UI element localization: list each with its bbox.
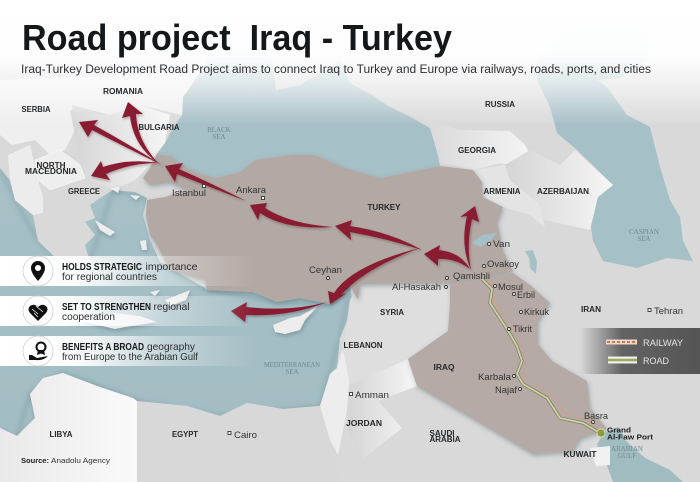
city markers and labels: Tikrit — [513, 324, 532, 335]
text: holds strategic: for regional countries — [62, 271, 157, 283]
title: Road project Iraq - Turkey — [22, 17, 452, 58]
city markers and labels: Tehran — [654, 306, 683, 317]
icon: location pin — [23, 256, 53, 286]
arrow: to Ankara — [250, 203, 333, 227]
Jordan — [348, 359, 417, 459]
arrow: to Serbia — [79, 120, 162, 165]
arrow: Ankara to Thrace — [165, 163, 246, 201]
arrow: to Romania — [122, 102, 158, 163]
arrow: north from Qamishli — [460, 206, 479, 270]
sea labels: SEA — [212, 133, 226, 141]
Albania — [8, 145, 43, 215]
country labels: ARABIA — [430, 435, 461, 444]
text: set to strengthen: SET TO STRENGTHEN — [62, 301, 151, 313]
city markers and labels: Ankara — [236, 185, 267, 196]
Arabian Gulf — [597, 427, 683, 482]
text: benefits a broad: BENEFITS A BROAD — [62, 341, 144, 353]
city markers and labels: Istanbul — [172, 188, 206, 199]
icon: hand with medal — [23, 336, 53, 366]
Black Sea — [157, 45, 440, 178]
Bulgaria and Thrace — [70, 105, 170, 190]
arrow: to Mediterranean — [231, 302, 327, 322]
country labels: IRAN — [581, 305, 601, 314]
arrow: to North Macedonia — [91, 161, 158, 180]
legend — [580, 328, 700, 374]
Georgia — [407, 115, 538, 170]
country labels: SERBIA — [22, 105, 51, 114]
city markers and labels: Qamishli — [453, 271, 490, 282]
sea labels — [207, 126, 659, 460]
icon: handshake heart — [23, 296, 53, 326]
sea labels: MEDITERRANEAN — [264, 361, 320, 369]
Azerbaijan — [505, 150, 613, 230]
arrow: to central east — [424, 245, 470, 269]
text: set to strengthen — [62, 301, 190, 323]
country labels — [22, 87, 601, 459]
coastal shading — [0, 168, 350, 436]
arrow: central Turkey — [335, 220, 422, 250]
country labels: EGYPT — [172, 430, 198, 439]
Turkey — [143, 154, 513, 304]
city markers and labels: Amman — [355, 390, 389, 401]
country labels: AZERBAIJAN — [537, 187, 589, 196]
text: holds strategic: HOLDS STRATEGIC — [62, 261, 142, 273]
country labels: LIBYA — [50, 430, 73, 439]
country labels: MACEDONIA — [25, 167, 77, 176]
Islands — [67, 187, 318, 334]
country labels: JORDAN — [346, 419, 382, 428]
city markers and labels: Kirkuk — [524, 307, 549, 318]
city markers and labels: Basra — [584, 411, 609, 422]
city markers and labels: Van — [493, 239, 510, 250]
info panel: geography — [0, 336, 255, 366]
city markers and labels: Karbala — [478, 372, 512, 383]
sea labels: SEA — [285, 368, 299, 376]
Caspian Sea — [537, 17, 693, 268]
Syria — [343, 284, 450, 401]
country labels: RUSSIA — [485, 100, 515, 109]
sea labels: ARABIAN — [611, 445, 643, 453]
North Macedonia — [35, 150, 85, 190]
Grand Al-Faw Port marker: Grand — [607, 428, 631, 434]
legend: railway: RAILWAY — [643, 338, 683, 348]
country labels: SYRIA — [380, 308, 404, 317]
arrows — [79, 102, 479, 322]
country labels: GREECE — [68, 187, 101, 196]
country labels: KUWAIT — [564, 450, 597, 459]
country labels: SAUDI — [430, 429, 454, 438]
text: benefits a broad — [62, 341, 198, 363]
road line — [482, 279, 600, 433]
legend: road: ROAD — [643, 356, 669, 366]
sea labels: SEA — [637, 235, 651, 243]
text: set to strengthen: regional — [154, 301, 190, 313]
city markers and labels: Ovakoy — [487, 259, 519, 270]
city markers and labels: Cairo — [234, 430, 257, 441]
arrow: to Ceyhan — [328, 248, 420, 304]
label: Ceyhan: Ceyhan — [309, 265, 342, 276]
source: Source: — [21, 456, 49, 465]
info panel: cooperation — [0, 296, 255, 326]
Grand Al-Faw Port marker — [597, 428, 654, 442]
road and railway route — [482, 279, 600, 433]
subtitle: Iraq-Turkey Development Road Project aims to connect Iraq to Turkey and Europe via railways, roads, ports, and cities — [21, 64, 651, 76]
Lake Van — [472, 233, 497, 247]
sea labels: BLACK — [207, 126, 231, 134]
Libya — [0, 373, 137, 482]
Red Sea — [285, 441, 318, 482]
city markers and labels — [172, 184, 683, 441]
text: holds strategic — [62, 261, 198, 283]
text: holds strategic: importance — [146, 261, 198, 273]
text: set to strengthen: cooperation — [62, 311, 115, 323]
country labels: LEBANON — [344, 341, 383, 350]
Lake Urmia — [525, 250, 537, 274]
city markers and labels: Al-Hasakah — [392, 282, 441, 293]
country labels: ARMENIA — [484, 187, 521, 196]
info panel: strategic importance — [0, 256, 255, 286]
Armenia — [473, 165, 545, 228]
country labels: TURKEY — [368, 203, 401, 212]
country labels: BULGARIA — [138, 123, 180, 132]
country labels: ROMANIA — [103, 87, 143, 96]
Lebanon and Israel — [320, 350, 350, 455]
sea labels: CASPIAN — [629, 228, 659, 236]
city markers and labels: Najaf — [495, 385, 517, 396]
Grand Al-Faw Port marker: Al-Faw Port — [607, 434, 654, 442]
Iraq — [408, 273, 607, 454]
sea labels: GULF — [618, 452, 636, 460]
source: Anadolu Agency — [51, 456, 110, 465]
city markers and labels: Mosul — [498, 282, 523, 293]
top fade — [0, 0, 700, 125]
Mediterranean Sea — [0, 168, 352, 436]
country labels: IRAQ — [434, 363, 454, 372]
country labels: NORTH — [36, 161, 66, 170]
Romania and Serbia — [0, 72, 200, 155]
railway line — [485, 279, 600, 431]
city markers and labels: Erbil — [517, 290, 535, 301]
text: benefits a broad: geography — [147, 341, 196, 353]
Kuwait — [590, 446, 610, 466]
Egypt — [137, 401, 340, 482]
source — [21, 456, 110, 465]
text: benefits a broad: from Europe to the Arabian Gulf — [62, 351, 198, 363]
country labels: GEORGIA — [458, 146, 496, 155]
